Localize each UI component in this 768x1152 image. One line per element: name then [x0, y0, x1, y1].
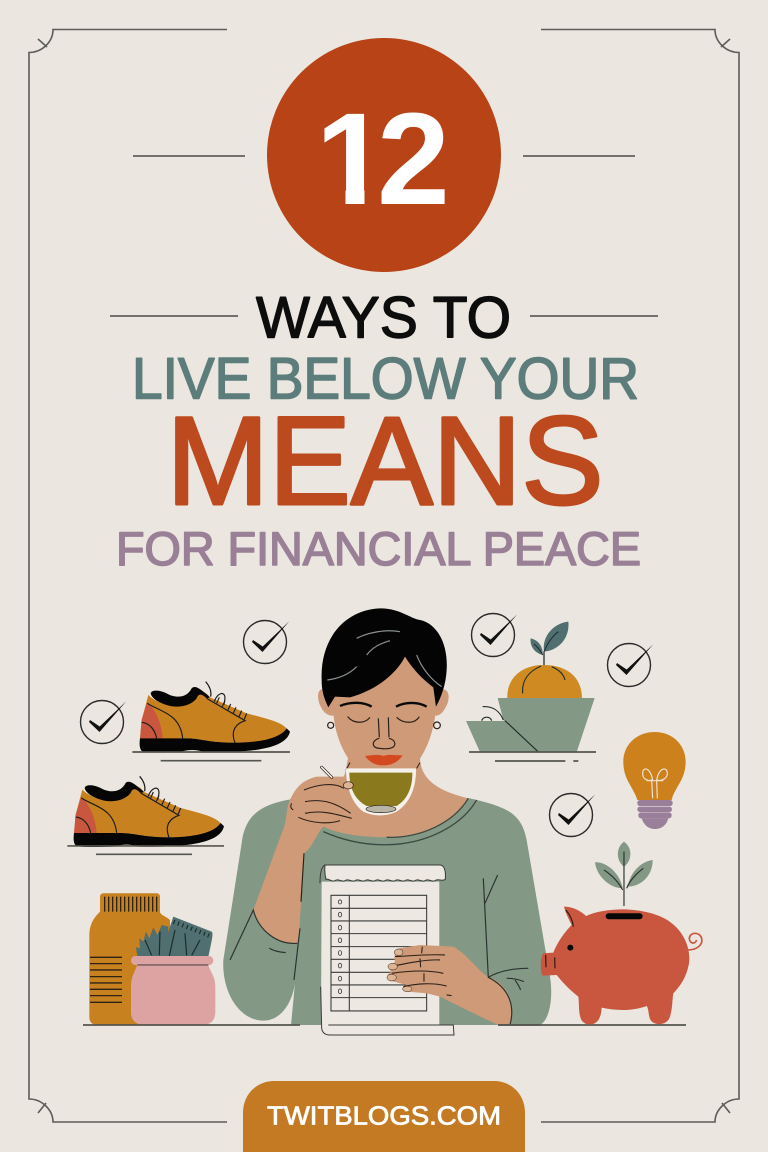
badge side lines — [133, 155, 635, 157]
sleeve lines — [230, 910, 300, 980]
left arm and hand — [253, 767, 353, 943]
lips — [365, 755, 403, 765]
heading: live below your: LIVE BELOW YOUR — [132, 347, 639, 412]
piggy sprout — [595, 842, 653, 906]
illustration: lower shoe — [67, 776, 224, 854]
sprout — [531, 622, 569, 665]
nose — [373, 717, 395, 749]
tea cup — [343, 768, 416, 815]
icon: light bulb — [623, 732, 686, 829]
icon: check 3 — [472, 614, 517, 656]
ground line — [498, 1022, 540, 1027]
hair — [322, 608, 447, 707]
number badge — [267, 38, 501, 272]
table line — [83, 1024, 686, 1026]
number badge: 1 — [316, 85, 388, 232]
left ear — [318, 689, 335, 716]
eyebrows — [340, 703, 427, 707]
plant — [136, 917, 212, 957]
icon: check 5 — [550, 794, 595, 836]
illustration: bottle and plant pot — [89, 893, 215, 1025]
face — [332, 640, 437, 770]
illustration: bowls with fruit and sprout — [466, 622, 596, 761]
checklist paper — [320, 865, 454, 1035]
pig tail — [688, 933, 702, 950]
jaw lines — [346, 763, 420, 770]
right ear — [433, 689, 449, 716]
illustration: woman drinking tea — [223, 608, 551, 1035]
heading: means: MEANS — [166, 392, 604, 531]
icon: check 4 — [608, 644, 653, 686]
collar lines — [323, 798, 477, 845]
sweater — [223, 787, 551, 1025]
bottle — [89, 893, 170, 1025]
earrings — [328, 722, 440, 729]
footer badge: TWITBLOGS.COM — [267, 1103, 501, 1131]
pig body — [541, 907, 689, 1025]
icon: check 1 — [244, 620, 289, 664]
right hand on paper — [387, 945, 511, 1025]
neck and chest — [323, 757, 468, 837]
coin slot — [606, 913, 643, 919]
pot — [131, 956, 215, 1025]
illustration: upper shoe — [132, 682, 290, 761]
icon: check 2 — [80, 700, 126, 744]
number badge: 2 — [377, 85, 450, 232]
footer badge — [243, 1081, 525, 1152]
heading: ways to: WAYS TO — [256, 286, 511, 350]
closed eyes — [348, 717, 419, 722]
pig face — [546, 910, 573, 968]
heading: for financial peace: FOR FINANCIAL PEACE — [116, 522, 641, 575]
right sleeve lines — [483, 875, 528, 1025]
bowls — [498, 698, 595, 752]
fruit — [507, 665, 582, 698]
illustration: piggy bank with sprout — [498, 842, 702, 1025]
